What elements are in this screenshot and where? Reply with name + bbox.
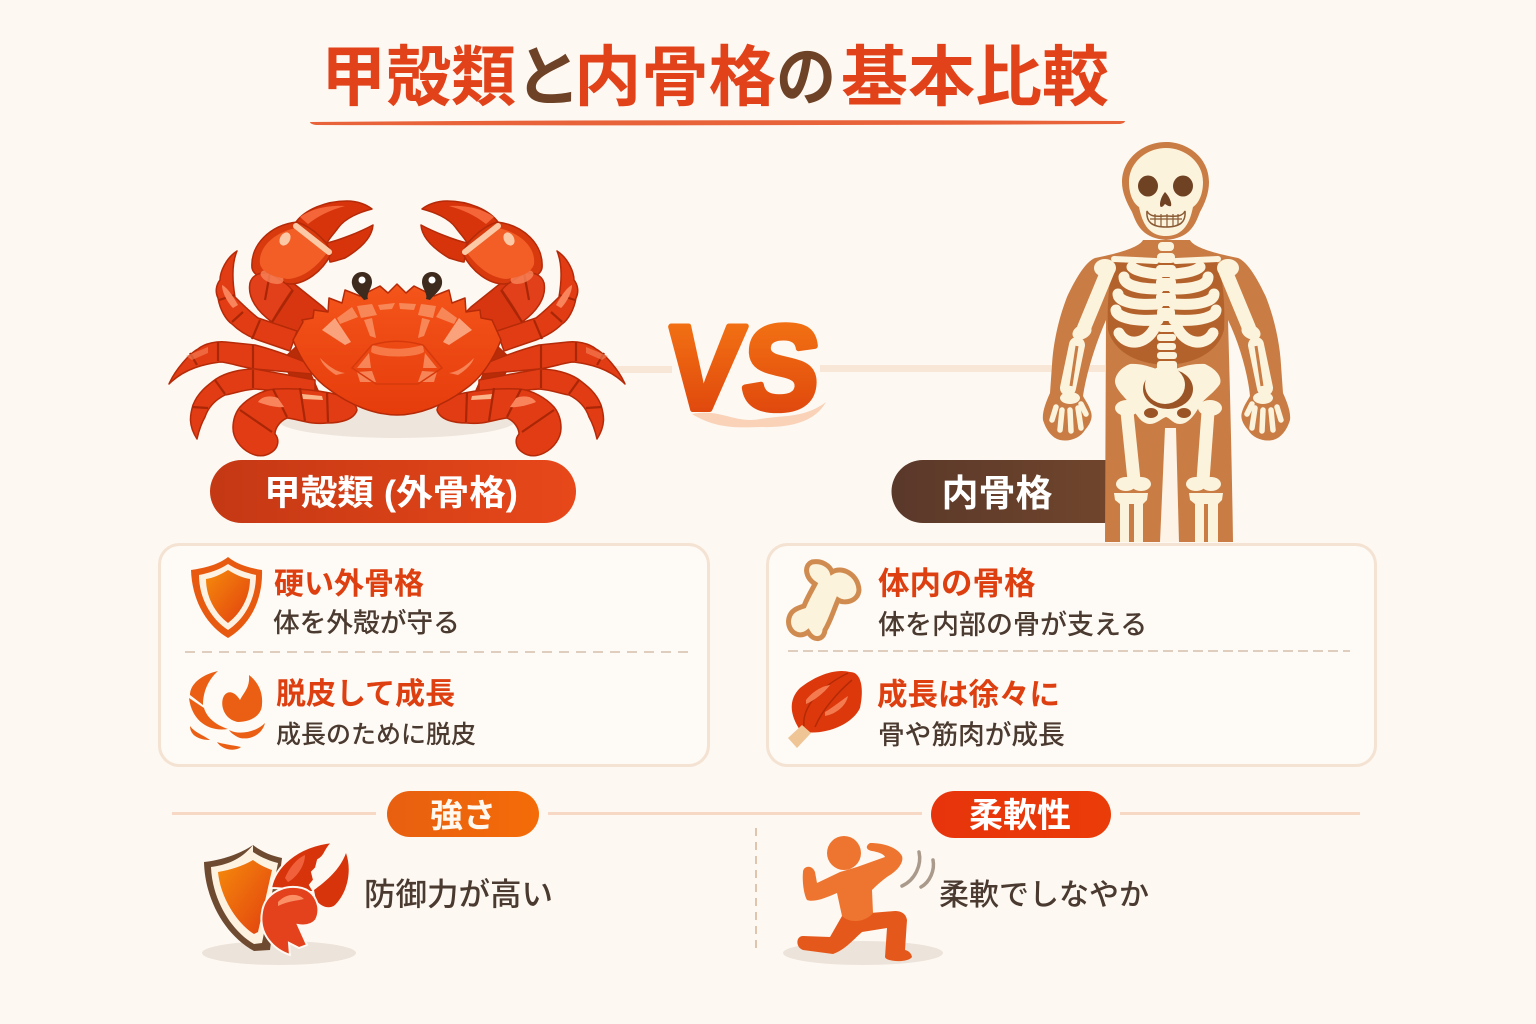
shadow [783, 941, 943, 965]
text: flexible and supple: 柔軟でしなやか [939, 879, 1149, 912]
icon: bone [789, 562, 859, 639]
description: bones and muscle grow: 骨や筋肉が成長 [878, 720, 1065, 750]
title: 内骨格 [574, 40, 776, 114]
icon: flexible runner [783, 836, 943, 965]
ribs right [1174, 267, 1216, 342]
description: bones support: 体を内部の骨が支える [878, 610, 1147, 640]
icon: shield and claw [202, 842, 356, 965]
heading: internal skeleton: 体内の骨格 [878, 565, 1036, 601]
crab shadow [279, 404, 515, 438]
crab shell grooves [352, 341, 442, 384]
panel: endoskeleton features [768, 544, 1376, 766]
shadow [202, 941, 356, 965]
divider [788, 650, 1350, 652]
divider [185, 651, 688, 653]
icon: shield [191, 557, 262, 638]
crab segment marks and highlights [186, 206, 345, 432]
motion lines [902, 852, 933, 887]
runner torso and arms [803, 843, 902, 921]
description: molts to grow: 成長のために脱皮 [276, 721, 476, 749]
crab shell lighter plates [320, 303, 474, 382]
crustacean pill label: 甲殻類 (外骨格) [264, 474, 518, 513]
runner head [827, 836, 861, 870]
left arm bones [1052, 259, 1116, 431]
skull [1122, 142, 1209, 240]
spine [1156, 242, 1177, 371]
panel: crustacean features [160, 544, 708, 766]
strength pill [387, 791, 539, 837]
crab eyes [352, 272, 442, 300]
ribs left [1116, 267, 1158, 342]
crustacean pill label [210, 460, 576, 523]
pelvis [1115, 364, 1220, 424]
vs connector lines [612, 365, 1105, 373]
endoskeleton pill label: 内骨格 [942, 473, 1052, 514]
right arm bones [1217, 259, 1281, 431]
heading: grow by molting: 脱皮して成長 [276, 678, 455, 711]
runner legs [797, 911, 912, 961]
vertical dashed divider [755, 828, 757, 950]
text: high defense: 防御力が高い [364, 876, 553, 912]
crab shell [293, 284, 501, 415]
VS text: VS [661, 301, 825, 435]
strength pill: 強さ [430, 797, 496, 834]
section divider lines [172, 812, 1360, 815]
icon: muscle [788, 671, 862, 748]
endoskeleton pill label [892, 460, 1106, 523]
flexibility pill [931, 791, 1111, 838]
icon: molting shell [189, 671, 265, 750]
claw [261, 842, 349, 955]
human skeleton illustration [1043, 142, 1290, 542]
body silhouette [1043, 240, 1290, 542]
heading: gradual growth: 成長は徐々に [877, 678, 1060, 712]
title: の [776, 40, 836, 114]
flexibility pill: 柔軟性 [969, 797, 1071, 835]
title: と [515, 40, 581, 114]
crab mirrored limbs [421, 201, 625, 456]
VS emblem [661, 301, 826, 435]
heading: hard exoskeleton: 硬い外骨格 [274, 568, 424, 601]
title: 基本比較 [841, 40, 1109, 114]
crab left half limbs [169, 201, 373, 456]
leg gap [1160, 428, 1179, 542]
clavicles [1114, 259, 1218, 261]
leg bones [1114, 400, 1223, 542]
crab illustration [169, 201, 625, 456]
description: shell protects: 体を外殻が守る [273, 608, 460, 638]
VS swoosh [692, 402, 826, 427]
title: 甲殻類 [321, 40, 516, 114]
rib cage background [1108, 262, 1224, 365]
title [321, 40, 1109, 114]
shield [204, 845, 282, 951]
title underline [310, 120, 1125, 125]
